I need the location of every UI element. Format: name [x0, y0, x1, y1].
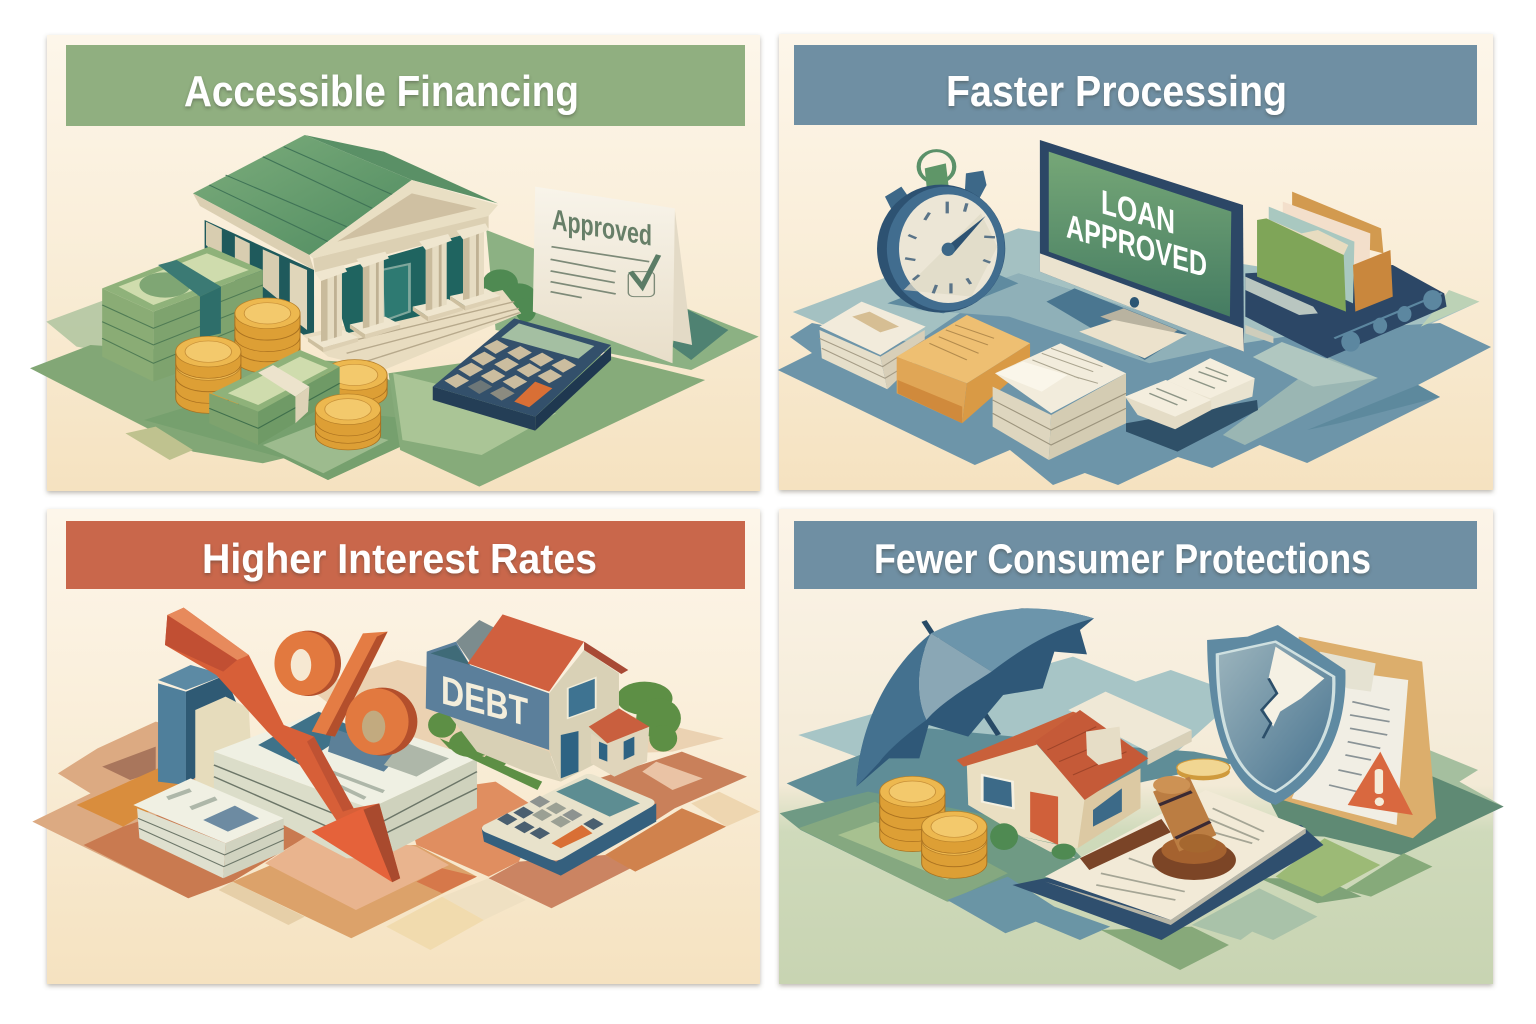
icon: orange paper stack: [897, 315, 1030, 423]
illustration: bank, money, approval and calculator: [30, 135, 759, 487]
icon: calculator: [433, 318, 611, 431]
illustration: arrow, percent, debt house and calculator: [32, 608, 760, 950]
text: loan approved on monitor: LOAN: [1101, 184, 1175, 242]
panel: accessible financing: [30, 35, 760, 491]
icon: approved document: [533, 187, 692, 363]
text: loan approved on monitor: [1066, 184, 1207, 285]
text: loan approved on monitor: APPROVED: [1066, 208, 1207, 285]
panel: faster processing: [778, 34, 1493, 490]
green ground plates: [30, 230, 759, 487]
icon: coin stacks: [880, 759, 1230, 878]
icon: monitor: [1040, 140, 1244, 358]
heading bar: accessible financing: [66, 45, 745, 126]
icon: background document: [1068, 692, 1192, 765]
heading bar: fewer consumer protections: [794, 521, 1477, 589]
icon: front coins: [315, 394, 381, 450]
illustration: stopwatch, monitor, conveyor and paper stacks: [778, 140, 1491, 485]
icon: cream paper stack: [819, 302, 926, 389]
icon: calculator: [482, 774, 656, 876]
illustration: umbrella, house, shield and gavel: [780, 608, 1504, 970]
heading bar: fewer consumer protections: Fewer Consumer Protections: [874, 535, 1371, 582]
heading bar: higher interest rates: Higher Interest Rates: [202, 535, 597, 582]
layered ground plates: [780, 657, 1504, 970]
icon: stopwatch: [877, 151, 1005, 313]
icon: house with debt sign: [426, 614, 681, 790]
icon: small document stacks on tray: [1125, 358, 1258, 452]
icon: coin stacks: [176, 298, 387, 413]
panel: fewer consumer protections: [779, 509, 1504, 984]
text: approved stamp: Approved: [552, 204, 652, 253]
icon: bank building: [193, 135, 521, 370]
icon: small money stack: [209, 350, 340, 445]
heading bar: higher interest rates: [66, 521, 745, 589]
heading bar: accessible financing: Accessible Financing: [184, 67, 579, 116]
text: debt sign: DEBT: [441, 667, 528, 735]
panel: higher interest rates: [32, 509, 760, 984]
icon: bush: [483, 269, 537, 322]
blue ground plates: [778, 228, 1491, 485]
icon: house: [957, 710, 1148, 860]
heading bar: faster processing: Faster Processing: [946, 67, 1287, 116]
icon: contract on folder: [1012, 790, 1323, 940]
icon: percent sign: [274, 631, 417, 756]
icon: gavel: [1080, 776, 1236, 880]
icon: large money stack: [102, 247, 263, 382]
icon: conveyor belt and folders: [1245, 192, 1447, 358]
heading bar: faster processing: [794, 45, 1477, 125]
icon: clipboard with warning: [1283, 637, 1436, 838]
orange ground plates: [32, 660, 760, 950]
icon: white paper stack: [993, 343, 1126, 460]
icon: falling arrow: [165, 608, 400, 882]
icon: cracked shield: [1207, 625, 1345, 805]
icon: rising bars: [158, 665, 253, 795]
icon: large document stack: [214, 708, 477, 858]
icon: small document stack: [133, 778, 284, 878]
icon: umbrella: [856, 608, 1094, 787]
